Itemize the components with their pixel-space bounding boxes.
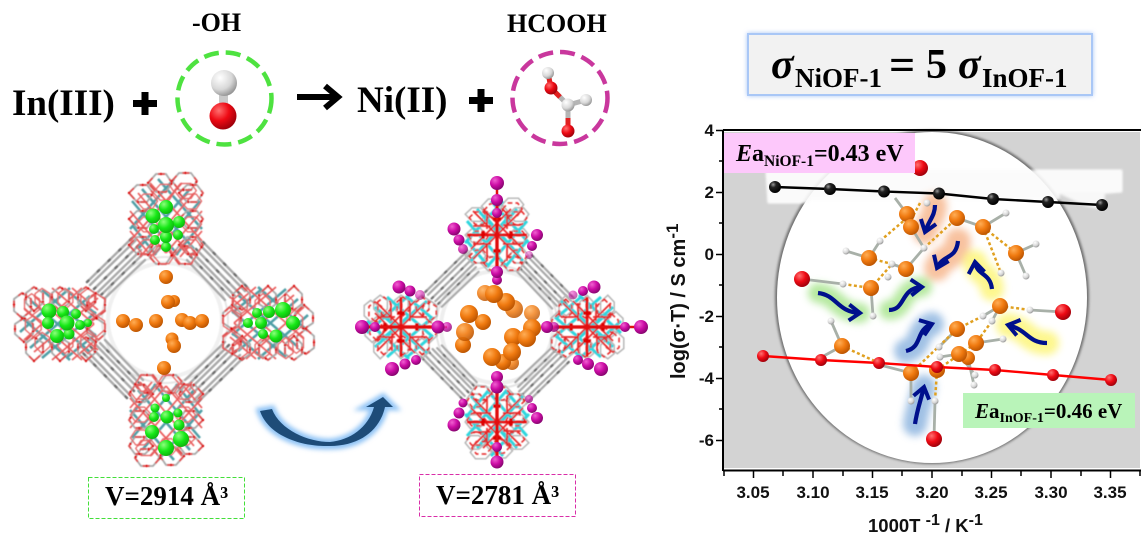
metal-organic nodes bbox=[14, 173, 314, 466]
x axis tick labels: 3.25 bbox=[974, 483, 1008, 502]
label: In(III): In(III) bbox=[12, 83, 115, 124]
icon: hydroxyl molecule in green dashed circle bbox=[178, 52, 272, 144]
x axis title: / K bbox=[940, 515, 969, 536]
proton pathway coloured highlights bbox=[818, 205, 1047, 424]
callout: InOF-1 activation energy: InOF-1 bbox=[1000, 411, 1044, 426]
white smear over inset top edge bbox=[766, 170, 1122, 203]
x axis tick labels: 3.35 bbox=[1093, 483, 1127, 502]
label: V=2781 volume box bbox=[420, 474, 576, 516]
arrow: reaction bbox=[297, 86, 338, 108]
label: Ni(II): Ni(II) bbox=[357, 80, 447, 121]
proton transfer arrows bbox=[818, 205, 1047, 424]
x axis tick labels bbox=[736, 483, 1127, 502]
label: V=2914 volume box bbox=[88, 478, 244, 518]
x axis tick labels: 3.30 bbox=[1034, 483, 1068, 502]
x axis tick labels: 3.05 bbox=[736, 483, 770, 502]
connecting linkers and pore ring bbox=[421, 251, 573, 403]
y axis title: -1 bbox=[663, 224, 682, 239]
label: -OH: -OH bbox=[192, 8, 241, 37]
y axis tick labels: 0 bbox=[705, 245, 714, 264]
icon: formic acid molecule in purple dashed circle bbox=[512, 52, 608, 144]
callout: NiOF-1 activation energy: =0.43 eV bbox=[814, 141, 904, 167]
orange water spheres bbox=[116, 270, 209, 375]
title: conductivity ratio box: 5 bbox=[926, 42, 947, 88]
label: V=2781 volume box: V=2781 Å³ bbox=[436, 480, 559, 510]
title: conductivity ratio box: σ bbox=[771, 42, 795, 88]
y axis tick labels: -4 bbox=[699, 369, 715, 388]
callout: InOF-1 activation energy: =0.46 eV bbox=[1044, 399, 1122, 423]
plot background bbox=[724, 132, 1140, 468]
x axis tick labels: 3.10 bbox=[796, 483, 830, 502]
y axis tick labels: -6 bbox=[699, 431, 714, 450]
white smear behind black series bbox=[766, 170, 1122, 210]
x axis title: 1000T bbox=[868, 515, 920, 536]
arrow: curved transformation arrow bbox=[260, 397, 393, 446]
x axis title: -1 bbox=[926, 512, 940, 529]
axes and ticks bbox=[716, 130, 1141, 478]
chart: Arrhenius plot bbox=[663, 121, 1141, 536]
title: conductivity ratio box: σ bbox=[958, 42, 982, 88]
red data series: InOF-1 bbox=[757, 350, 1117, 386]
y axis tick labels: 2 bbox=[705, 183, 714, 202]
reaction equation bbox=[12, 8, 608, 144]
framework: NiOF-1 structure bbox=[355, 176, 648, 468]
water cluster molecules bbox=[794, 160, 1071, 447]
title: conductivity ratio box bbox=[747, 33, 1093, 96]
y axis title: log(σ·T) / S cm bbox=[668, 239, 690, 379]
title: conductivity ratio box: InOF-1 bbox=[982, 63, 1068, 93]
connecting linkers and pore ring bbox=[82, 237, 248, 403]
circular inset bbox=[775, 130, 1089, 464]
label: V=2914 volume box: V=2914 Å³ bbox=[105, 481, 228, 511]
x axis tick labels: 3.20 bbox=[915, 483, 949, 502]
callout: NiOF-1 activation energy: Ea bbox=[736, 141, 764, 167]
callout: NiOF-1 activation energy bbox=[724, 133, 915, 173]
metal-organic nodes bbox=[361, 195, 627, 462]
y axis tick labels: 4 bbox=[705, 121, 715, 140]
black data series: NiOF-1 bbox=[769, 181, 1108, 211]
title: conductivity ratio box: NiOF-1 bbox=[795, 63, 882, 93]
y axis tick labels bbox=[699, 121, 715, 450]
x axis tick labels: 3.15 bbox=[855, 483, 889, 502]
callout: InOF-1 activation energy bbox=[963, 393, 1135, 428]
orange water spheres bbox=[455, 285, 541, 370]
icon: plus bbox=[469, 89, 493, 112]
callout: InOF-1 activation energy: Ea bbox=[975, 399, 1000, 423]
magenta formate spheres bbox=[355, 176, 648, 468]
callout: NiOF-1 activation energy: NiOF-1 bbox=[764, 153, 814, 170]
y axis tick labels: -2 bbox=[699, 307, 714, 326]
framework: InOF-1 structure bbox=[14, 173, 314, 466]
label: HCOOH: HCOOH bbox=[507, 9, 607, 38]
green guest spheres bbox=[42, 200, 300, 456]
x axis title: -1 bbox=[969, 512, 983, 529]
icon: plus bbox=[133, 92, 157, 115]
title: conductivity ratio box: = bbox=[889, 39, 915, 90]
